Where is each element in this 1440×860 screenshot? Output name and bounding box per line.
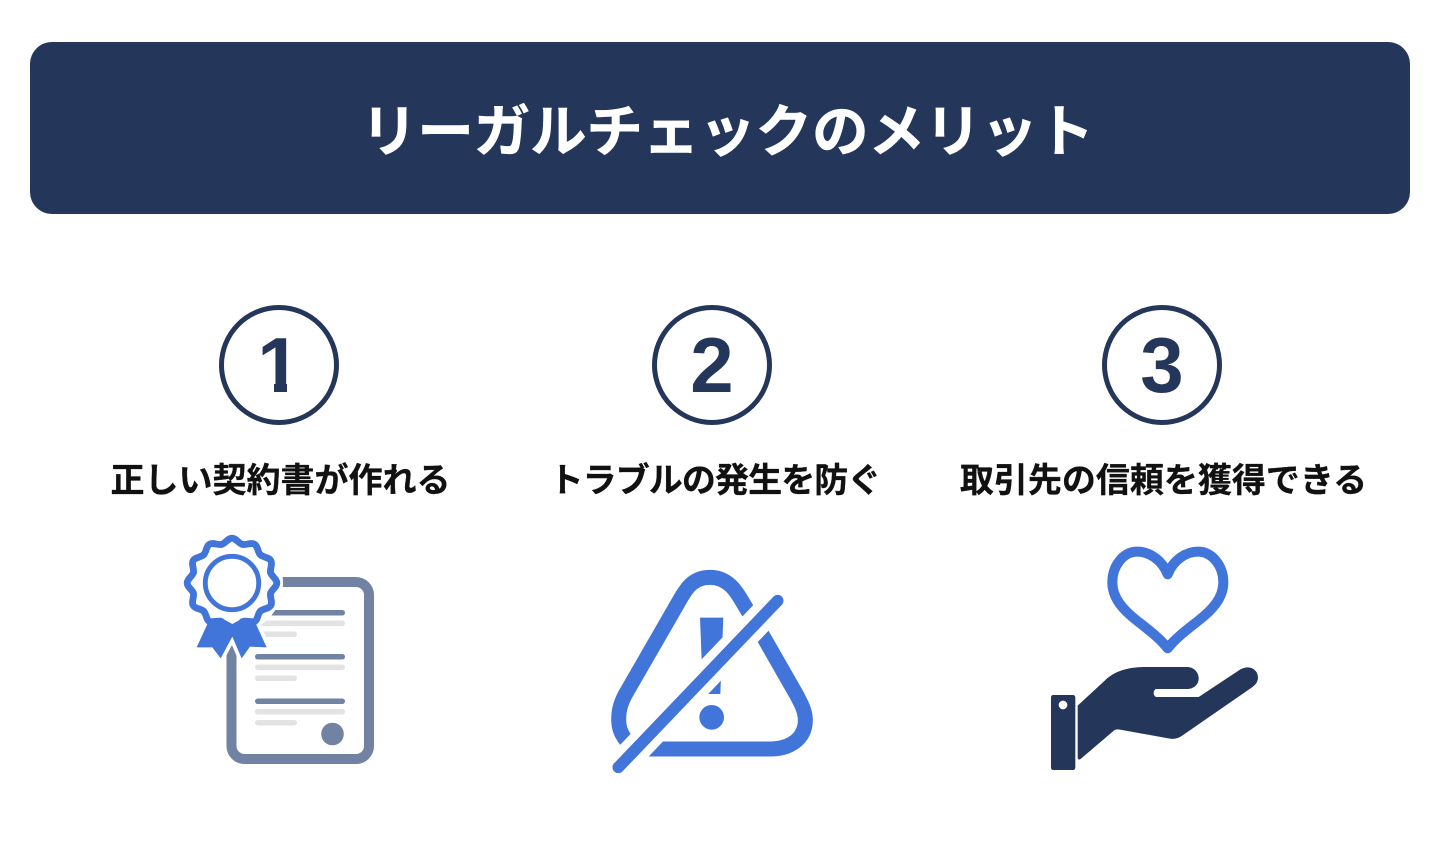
number badge 2: 2 [690, 321, 734, 409]
heading: gain trust: 取引先の信頼を獲得できる [960, 453, 1367, 502]
icon: warning triangle crossed out [603, 577, 805, 783]
number badge 1 [219, 305, 339, 425]
heading: correct contract: 正しい契約書が作れる [110, 453, 450, 502]
number badge 3 [1102, 305, 1222, 425]
slash [603, 587, 790, 783]
number badge 1: 1 [257, 321, 301, 409]
number badge 3: 3 [1140, 321, 1184, 409]
document sheet [232, 582, 369, 759]
sleeve cuff [1051, 695, 1075, 770]
heading: prevent trouble: トラブルの発生を防ぐ [550, 453, 880, 502]
number badge 2 [652, 305, 772, 425]
icon: hand holding heart [1051, 552, 1258, 770]
title banner [30, 42, 1410, 214]
title: リーガルチェックのメリット [361, 87, 1094, 168]
heart [1112, 552, 1223, 648]
exclamation mark [699, 618, 724, 730]
icon: certificate with seal [181, 532, 369, 759]
ribbon seal [181, 532, 283, 658]
triangle outline [619, 577, 805, 749]
hand [1078, 667, 1258, 759]
